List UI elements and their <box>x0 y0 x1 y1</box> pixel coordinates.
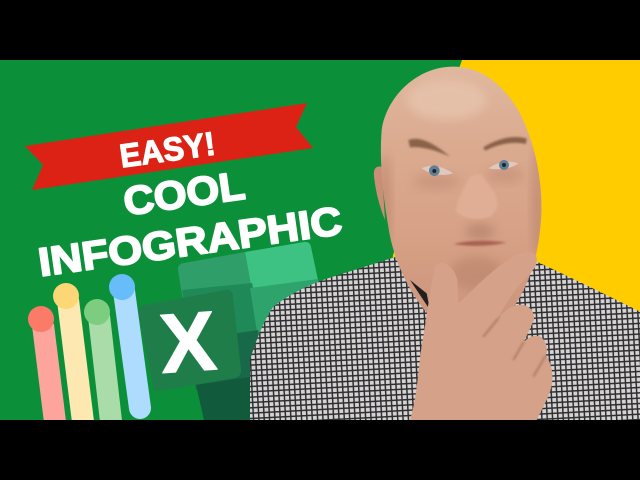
icon: Excel logo <box>138 242 336 420</box>
head <box>381 67 541 317</box>
photo: man thinking <box>250 67 640 420</box>
heading: EASY: EASY! <box>117 125 218 175</box>
heading: COOL: COOL <box>121 164 248 224</box>
shadow under the neck <box>410 280 428 307</box>
icon: Excel X letter: X <box>157 293 219 391</box>
bottom letterbox bar <box>0 420 640 480</box>
right eyebrow <box>483 137 527 151</box>
left eyebrow <box>408 139 450 157</box>
right eye <box>488 160 518 170</box>
shirt <box>250 257 640 420</box>
hand <box>410 252 552 420</box>
yellow bar <box>53 283 84 430</box>
green background <box>0 60 640 420</box>
yellow background panel <box>380 60 640 420</box>
green bar <box>84 299 112 430</box>
chart: coloured pencil bars <box>28 274 140 430</box>
thumbnail scene <box>0 60 640 420</box>
ear <box>374 166 385 220</box>
red bar <box>28 306 56 430</box>
mouth <box>453 241 507 246</box>
blue bar <box>109 274 140 408</box>
banner: red ribbon <box>25 103 313 190</box>
hand finger creases <box>483 318 546 377</box>
nose <box>456 173 497 219</box>
left eye <box>422 165 453 176</box>
top letterbox bar <box>0 0 640 60</box>
heading: INFOGRAPHIC: INFOGRAPHIC <box>36 199 345 285</box>
face shading <box>379 80 545 290</box>
